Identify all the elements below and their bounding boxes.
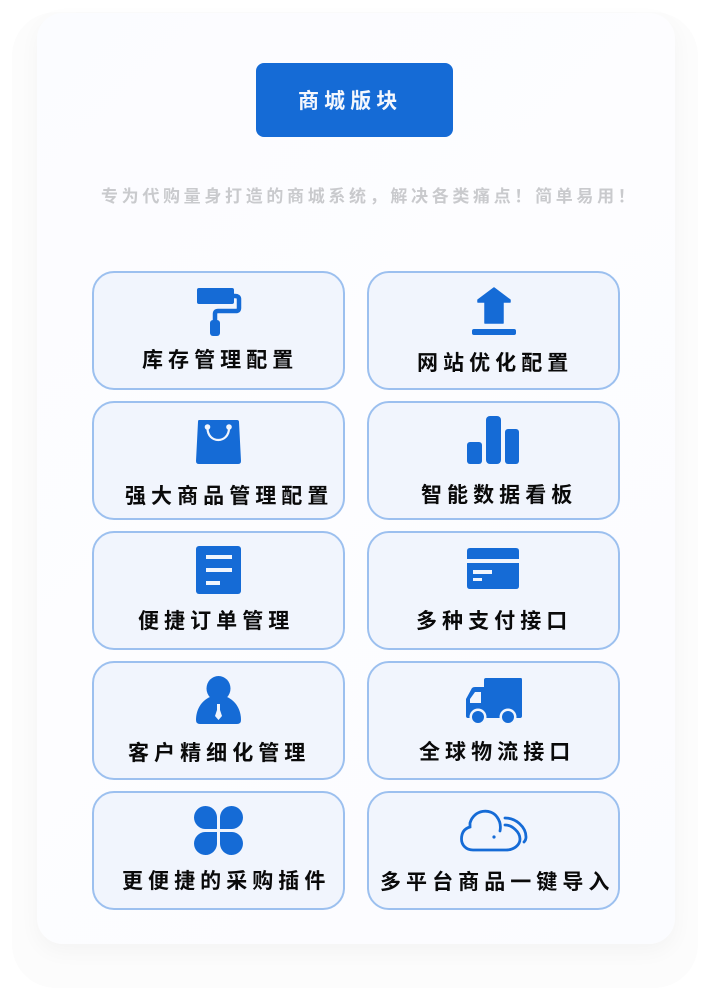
- icon: document: [196, 546, 241, 594]
- subtitle: 专为代购量身打造的商城系统，解决各类痛点！简单易用！: [101, 187, 638, 206]
- panel: global logistics: [367, 661, 620, 780]
- icon: shopping bag: [196, 420, 241, 464]
- panel: product management: [92, 401, 345, 520]
- label: 库存管理配置: [142, 349, 298, 372]
- icon: person with tie: [196, 676, 241, 724]
- panel: customer management: [92, 661, 345, 780]
- icon: truck: [466, 678, 522, 723]
- panel: purchase plugin: [92, 791, 345, 910]
- label: 多平台商品一键导入: [380, 871, 614, 894]
- panel: inventory config: [92, 271, 345, 390]
- panel: one-click import: [367, 791, 620, 910]
- label: 强大商品管理配置: [125, 485, 333, 508]
- panel: site optimisation: [367, 271, 620, 390]
- icon: four-leaf clover: [194, 806, 243, 855]
- icon: upload arrow: [472, 287, 516, 335]
- icon: credit card: [467, 548, 519, 589]
- label: 智能数据看板: [421, 484, 577, 507]
- title button: [256, 63, 453, 137]
- label: 便捷订单管理: [138, 610, 294, 633]
- title button: 商城版块: [298, 90, 402, 113]
- icon: bar chart: [467, 416, 519, 464]
- panel: order management: [92, 531, 345, 650]
- label: 全球物流接口: [419, 741, 575, 764]
- panel: payment interfaces: [367, 531, 620, 650]
- label: 更便捷的采购插件: [122, 870, 330, 893]
- label: 多种支付接口: [416, 610, 572, 633]
- label: 客户精细化管理: [128, 742, 310, 765]
- label: 网站优化配置: [417, 352, 573, 375]
- icon: cloud: [460, 810, 528, 852]
- icon: paint roller: [197, 288, 242, 336]
- panel: dashboard: [367, 401, 620, 520]
